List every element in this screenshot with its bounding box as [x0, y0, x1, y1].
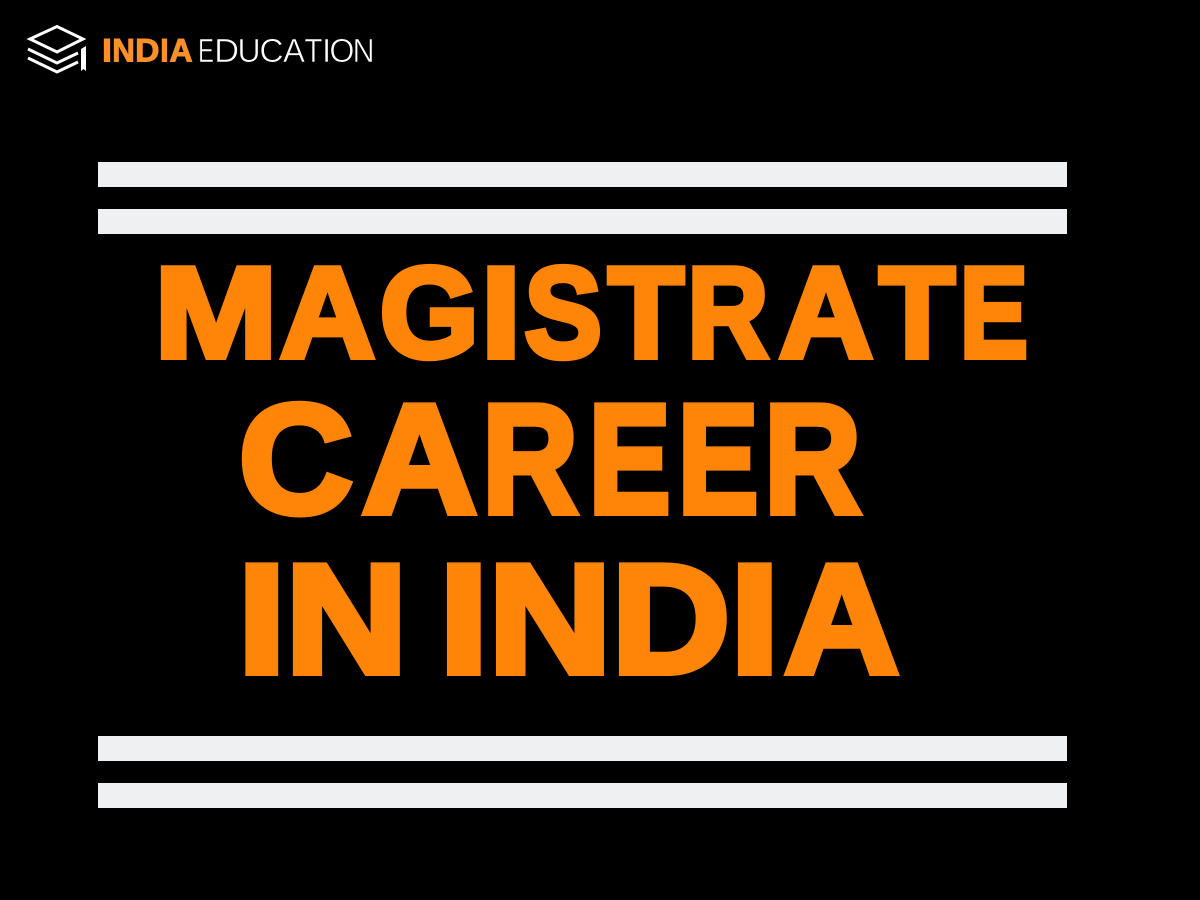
title line 3: I — [439, 532, 489, 706]
title line 2: A — [362, 372, 477, 546]
logo wordmark: EDUCATION: C — [259, 32, 284, 69]
logo wordmark: EDUCATION: N — [353, 32, 374, 69]
title — [154, 241, 1028, 706]
title line 1: S — [524, 241, 602, 385]
title line 1: G — [380, 241, 479, 385]
title line 3: N — [488, 532, 612, 706]
title line 3: A — [784, 532, 899, 706]
title line 3: D — [612, 532, 730, 706]
title line 1: M — [154, 241, 277, 385]
logo wordmark: EDUCATION: U — [238, 32, 261, 69]
logo wordmark: EDUCATION: T — [304, 32, 322, 69]
title line 2: E — [678, 372, 758, 546]
logo wordmark: INDIA: I — [102, 32, 112, 68]
title line 3: I — [238, 532, 286, 706]
title line 1: T — [608, 241, 684, 385]
logo wordmark: EDUCATION: I — [322, 32, 331, 69]
title line 1: R — [687, 241, 768, 385]
logo wordmark: INDIA: I — [160, 32, 169, 68]
title line 1: I — [481, 241, 521, 385]
top double bars — [98, 162, 1067, 234]
logo wordmark: EDUCATION: A — [283, 32, 305, 69]
title line 3: N — [285, 532, 407, 706]
title line 2: R — [482, 372, 578, 546]
title line 2: E — [589, 372, 670, 546]
title line 1: E — [960, 241, 1028, 385]
title line 1: T — [879, 241, 955, 385]
title line 2: C — [239, 372, 353, 546]
logo wordmark: EDUCATION: D — [214, 32, 239, 69]
title line 1: A — [779, 241, 873, 385]
logo wordmark: INDIA: A — [170, 32, 193, 68]
bottom double bars — [98, 736, 1067, 808]
title line 1: A — [280, 241, 375, 385]
title line 3: I — [730, 532, 780, 706]
logo wordmark: EDUCATION: O — [329, 32, 354, 69]
logo wordmark: INDIA: N — [112, 32, 135, 68]
logo wordmark: INDIA: D — [135, 32, 159, 68]
logo wordmark: EDUCATION: E — [198, 32, 214, 69]
title line 2: R — [764, 372, 861, 546]
logo — [28, 26, 374, 72]
icon: graduation cap on stacked books — [28, 26, 86, 72]
